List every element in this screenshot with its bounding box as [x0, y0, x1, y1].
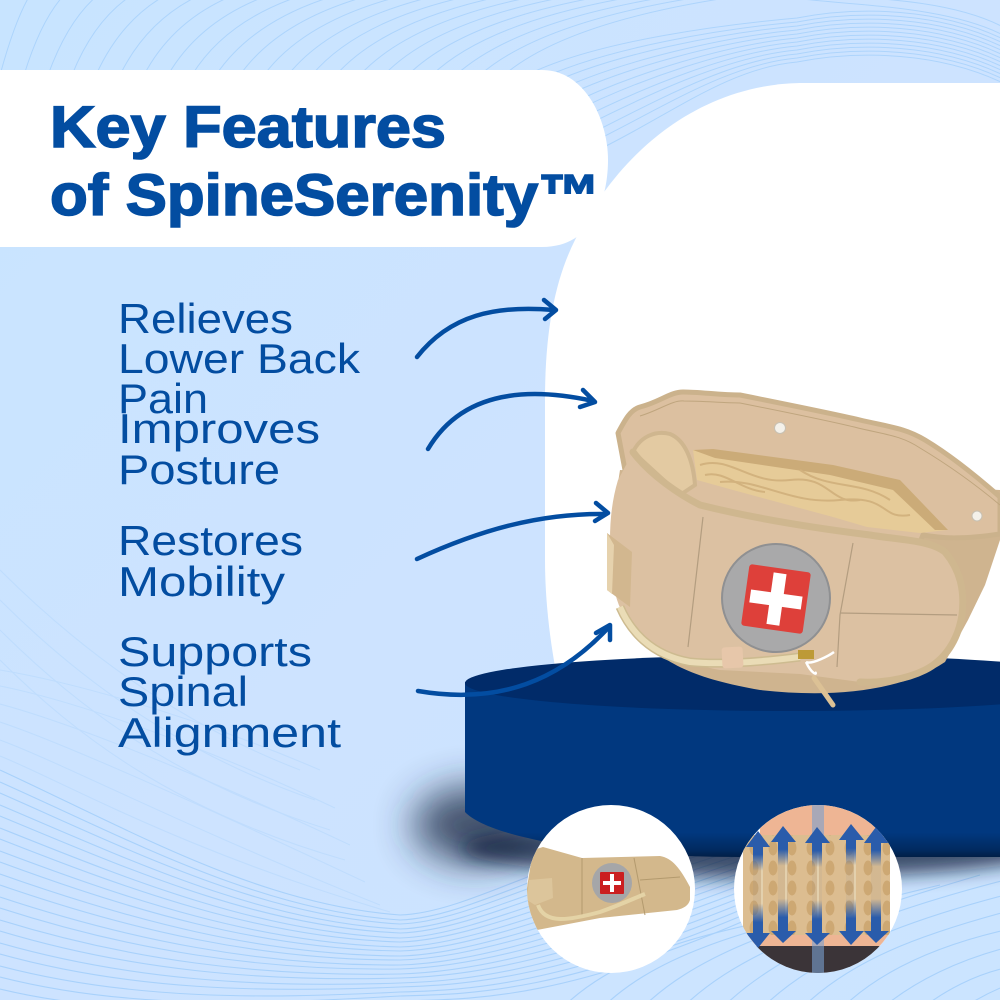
air tube — [620, 607, 834, 705]
product: inflatable back belt — [607, 392, 1000, 705]
inner cushion — [693, 449, 948, 533]
flap seams — [688, 517, 957, 667]
feature: supports spinal alignment: Supports — [118, 628, 312, 675]
side clip — [607, 533, 632, 607]
grommet: right snap — [972, 511, 982, 521]
arrow: restores mobility — [417, 503, 608, 559]
feature: restores mobility — [118, 517, 303, 605]
feature: relieves lower back pain: Lower Back — [118, 335, 361, 382]
badge — [592, 863, 632, 903]
front flap — [610, 452, 963, 682]
rim stitching — [640, 401, 1000, 505]
feature: relieves lower back pain: Relieves — [118, 295, 293, 342]
white backdrop blob behind product — [545, 83, 1000, 672]
arrow: relieves lower back pain — [417, 300, 556, 357]
title: of SpineSerenity™ — [50, 163, 600, 228]
inset: spine decompression — [734, 805, 902, 976]
feature: supports spinal alignment: Alignment — [118, 709, 341, 756]
feature: relieves lower back pain: Pain — [118, 375, 208, 422]
feature: supports spinal alignment: Spinal — [118, 668, 248, 715]
background wave lines: top — [0, 0, 1000, 147]
title — [50, 95, 600, 228]
podium — [413, 655, 1000, 878]
flap edge binding — [633, 452, 963, 682]
title: Key Features — [50, 95, 446, 160]
belt lower pleats — [614, 470, 1000, 693]
feature: improves posture: Improves — [118, 405, 320, 452]
grommet: rear snap — [774, 422, 786, 434]
feature: improves posture — [118, 405, 320, 493]
arrow: improves posture — [428, 390, 595, 449]
arrows — [746, 824, 889, 948]
red cross patch — [741, 564, 811, 634]
feature: restores mobility: Mobility — [118, 558, 285, 605]
feature: improves posture: Posture — [118, 446, 280, 493]
feature: relieves lower back pain — [118, 295, 361, 422]
feature: restores mobility: Restores — [118, 517, 303, 564]
feature list — [118, 295, 361, 756]
inset: belt laid flat — [525, 805, 695, 973]
badge — [722, 544, 830, 652]
arrow: supports spinal alignment — [418, 625, 610, 695]
background wave lines: bottom — [0, 570, 1000, 1000]
title panel — [0, 70, 608, 247]
inner pad — [633, 433, 695, 495]
feature: supports spinal alignment — [118, 628, 341, 756]
belt back wall — [618, 392, 1000, 640]
